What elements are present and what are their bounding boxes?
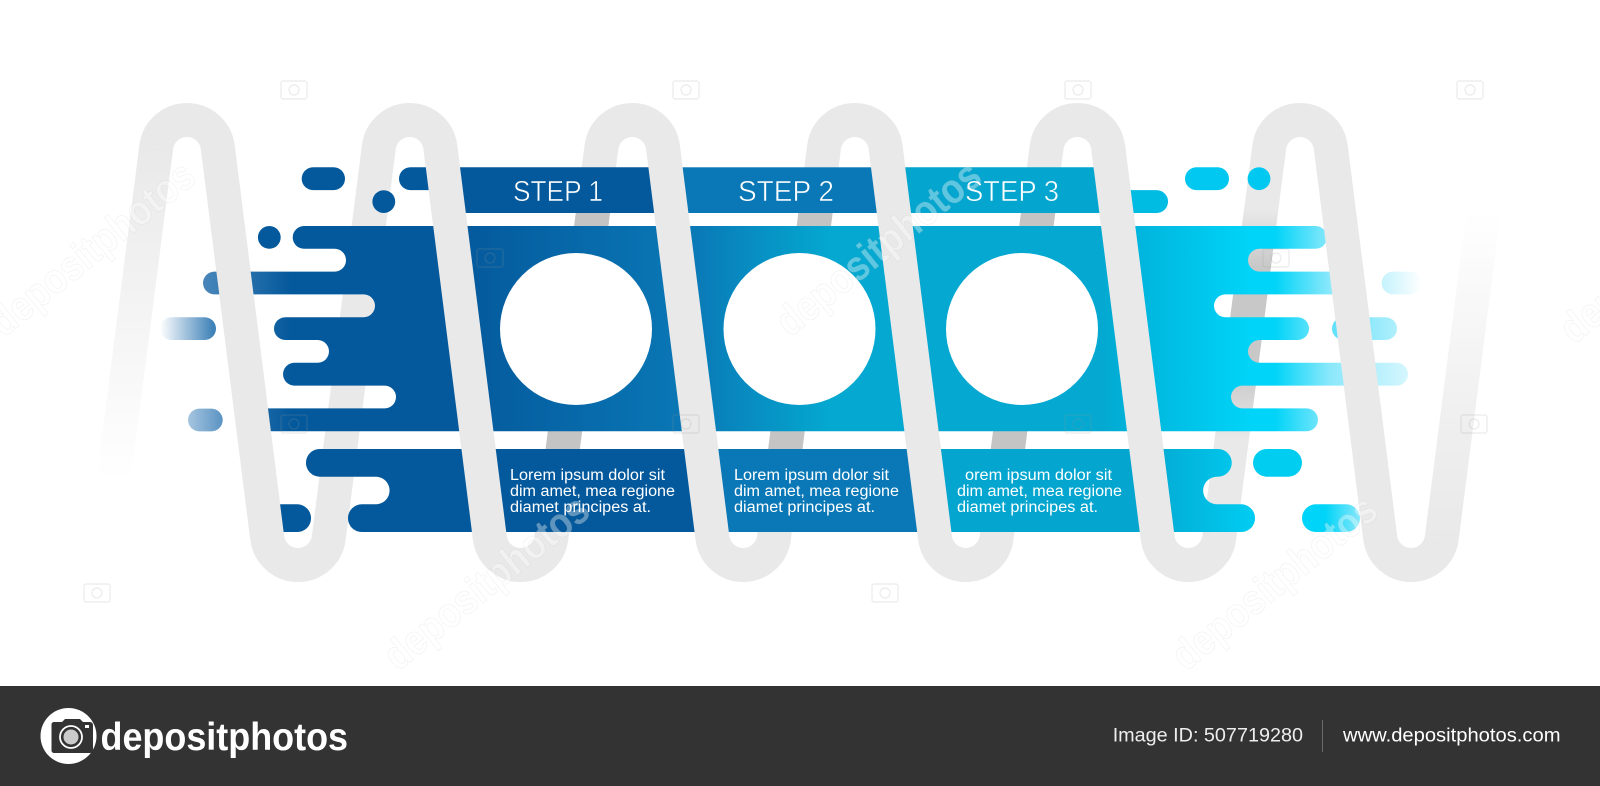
panel: step 1 <box>306 167 707 532</box>
watermark camera marks <box>84 81 1487 602</box>
step 1 header band <box>399 167 668 213</box>
step 2 body text: dim amet, mea regione <box>734 483 899 500</box>
watermark: depositphotos <box>766 151 990 345</box>
step 2 heading: STEP 2 <box>738 176 834 208</box>
step 3 circle placeholder <box>946 253 1098 405</box>
step 2 text band <box>707 449 930 532</box>
panel: step 2 <box>668 167 930 532</box>
coil rear strands and arches <box>156 120 1442 565</box>
floating pills: right <box>1185 167 1422 532</box>
right header pill <box>1100 190 1168 213</box>
image id: Image ID: 507719280 <box>1113 725 1303 747</box>
floating pills: left <box>160 167 395 532</box>
step 1 body text: Lorem ipsum dolor sit <box>510 467 666 484</box>
step 3 header band <box>891 167 1114 213</box>
watermark: depositphotos <box>1162 485 1386 679</box>
step 1 text band <box>306 449 707 532</box>
watermark <box>0 151 1600 679</box>
step 1 body text: diamet principes at. <box>510 499 651 516</box>
brand wordmark: depositphotos <box>100 716 348 759</box>
main body band with rounded notches <box>203 226 1408 431</box>
coil left fading tail <box>114 147 156 480</box>
watermark: depositphotos <box>374 485 598 679</box>
step 3 heading: STEP 3 <box>965 176 1059 208</box>
step 1 circle placeholder <box>500 253 652 405</box>
coil shaded rear segments <box>562 209 1039 453</box>
coil: rear loop <box>114 120 1484 565</box>
step 2 body text: diamet principes at. <box>734 499 875 516</box>
step 2 circle placeholder <box>724 253 876 405</box>
step 2 body text: Lorem ipsum dolor sit <box>734 467 890 484</box>
step 3 body text: orem ipsum dolor sit <box>965 467 1113 484</box>
coil shaded rear segment right <box>1230 209 1261 453</box>
step 1 body text: dim amet, mea regione <box>510 483 675 500</box>
icon: camera logo <box>40 708 96 764</box>
website url: www.depositphotos.com <box>1342 725 1560 747</box>
footer divider <box>1322 720 1323 752</box>
step 2 header band <box>668 167 891 213</box>
step 3 body text: diamet principes at. <box>957 499 1098 516</box>
coil: front strands <box>218 147 1380 538</box>
coil right fading tail <box>1442 210 1484 538</box>
step 3 text band <box>929 449 1255 532</box>
footer bar <box>0 686 1600 786</box>
panel: step 3 <box>891 167 1255 532</box>
step 1 heading: STEP 1 <box>513 176 603 208</box>
step 3 body text: dim amet, mea regione <box>957 483 1122 500</box>
